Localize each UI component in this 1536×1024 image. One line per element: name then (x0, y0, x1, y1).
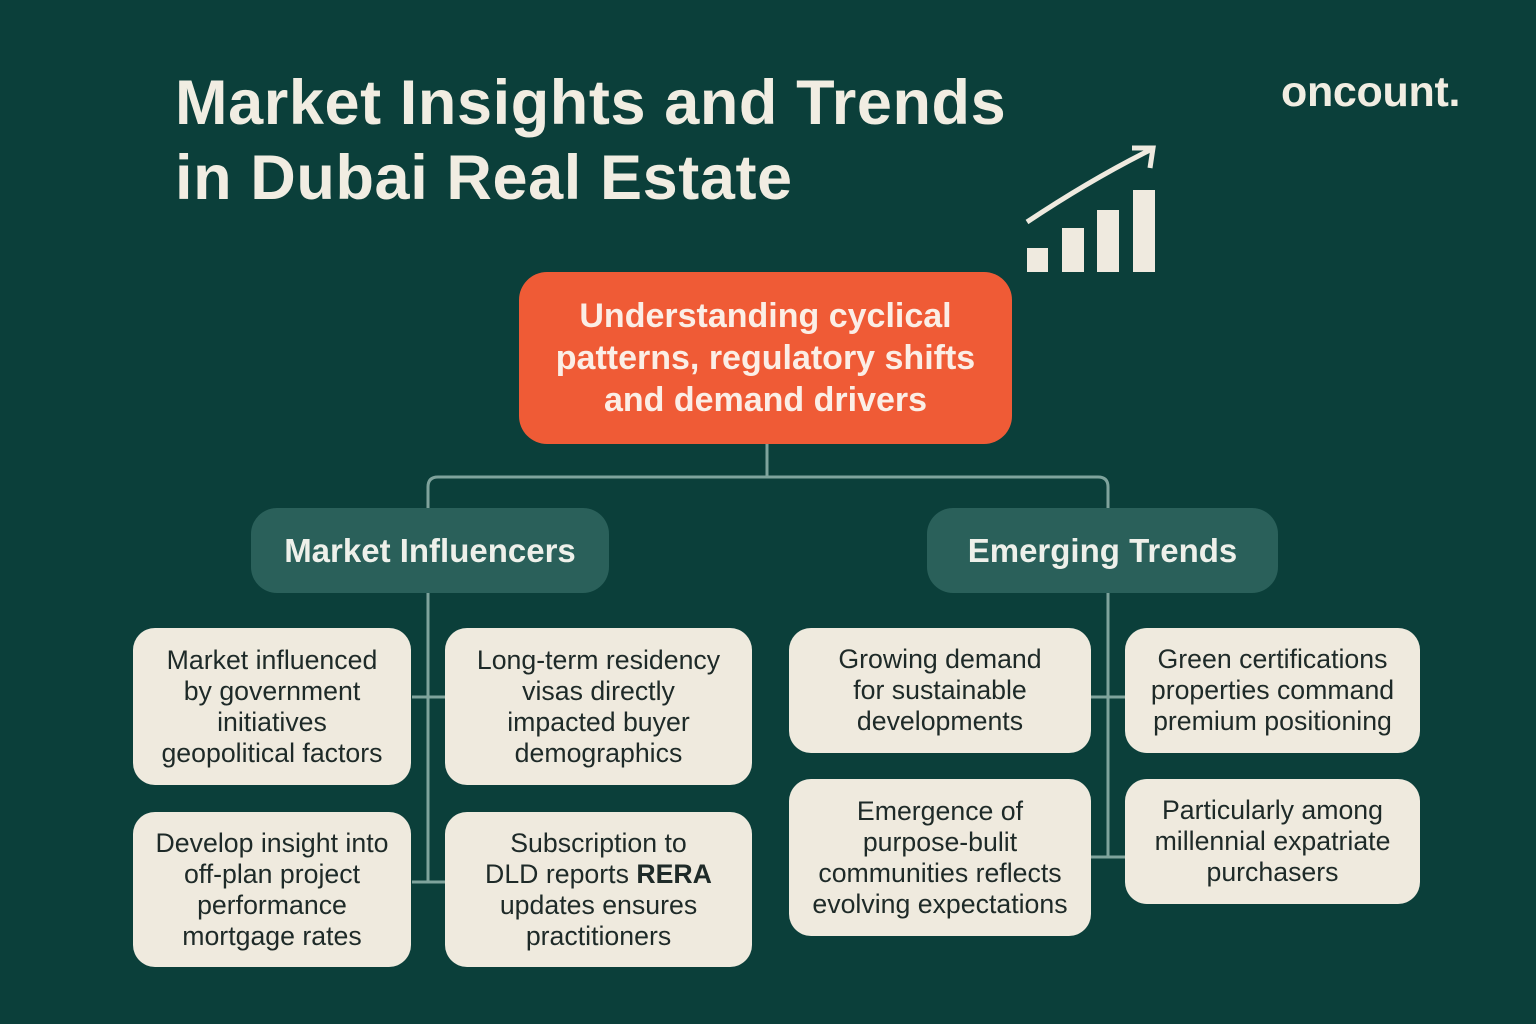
card: DLD: updates ensures (500, 890, 697, 920)
card: millennial: purchasers (1206, 857, 1339, 887)
card: millennial: Particularly among (1162, 795, 1383, 825)
card: communities: evolving expectations (812, 888, 1068, 918)
hub box (519, 272, 1012, 444)
card: sustainable: Growing demand (838, 644, 1042, 674)
card: sustainable (789, 628, 1091, 753)
card: sustainable: developments (857, 706, 1023, 736)
card: government: geopolitical factors (161, 738, 383, 768)
card: government: by government (184, 676, 360, 706)
pill: Emerging Trends (927, 508, 1278, 593)
card: residency: demographics (515, 738, 682, 768)
title (175, 68, 1006, 213)
hub box: patterns, regulatory shifts (556, 339, 975, 377)
card: communities: communities reflects (818, 858, 1062, 888)
card: residency: Long-term residency (477, 644, 720, 674)
card: green: Green certifications (1158, 644, 1387, 674)
card: communities (789, 779, 1091, 936)
card: off-plan (133, 812, 411, 967)
card: green: premium positioning (1153, 706, 1392, 736)
icon: growth chart (1026, 146, 1156, 272)
hub box: and demand drivers (604, 381, 927, 419)
hub box: Understanding cyclical (579, 297, 952, 335)
card: green (1125, 628, 1420, 753)
title: in Dubai Real Estate (175, 143, 793, 213)
card: government (133, 628, 411, 785)
card: DLD: DLD reports RERA (485, 858, 712, 888)
card: government: Market influenced (167, 644, 377, 674)
title: Market Insights and Trends (175, 68, 1006, 138)
card: communities: purpose-bulit (863, 826, 1017, 856)
pill: Emerging Trends: Emerging Trends (968, 532, 1237, 568)
card: millennial: millennial expatriate (1155, 826, 1390, 856)
pill: Market Influencers: Market Influencers (284, 532, 576, 568)
card: residency (445, 628, 752, 785)
card: sustainable: for sustainable (853, 675, 1027, 705)
card: DLD (445, 812, 752, 967)
card: residency: visas directly (522, 676, 675, 706)
card: off-plan: off-plan project (184, 858, 360, 888)
card: green: properties command (1151, 675, 1394, 705)
card: off-plan: performance (197, 890, 347, 920)
card: millennial (1125, 779, 1420, 904)
card: communities: Emergence of (857, 796, 1023, 826)
card: DLD: practitioners (526, 920, 671, 950)
card: government: initiatives (217, 706, 327, 736)
card: residency: impacted buyer (507, 706, 690, 736)
card: off-plan: mortgage rates (182, 920, 362, 950)
pill: Market Influencers (251, 508, 609, 593)
card: DLD: Subscription to (510, 828, 687, 858)
card: off-plan: Develop insight into (156, 828, 388, 858)
logo: oncount. (1281, 68, 1460, 116)
